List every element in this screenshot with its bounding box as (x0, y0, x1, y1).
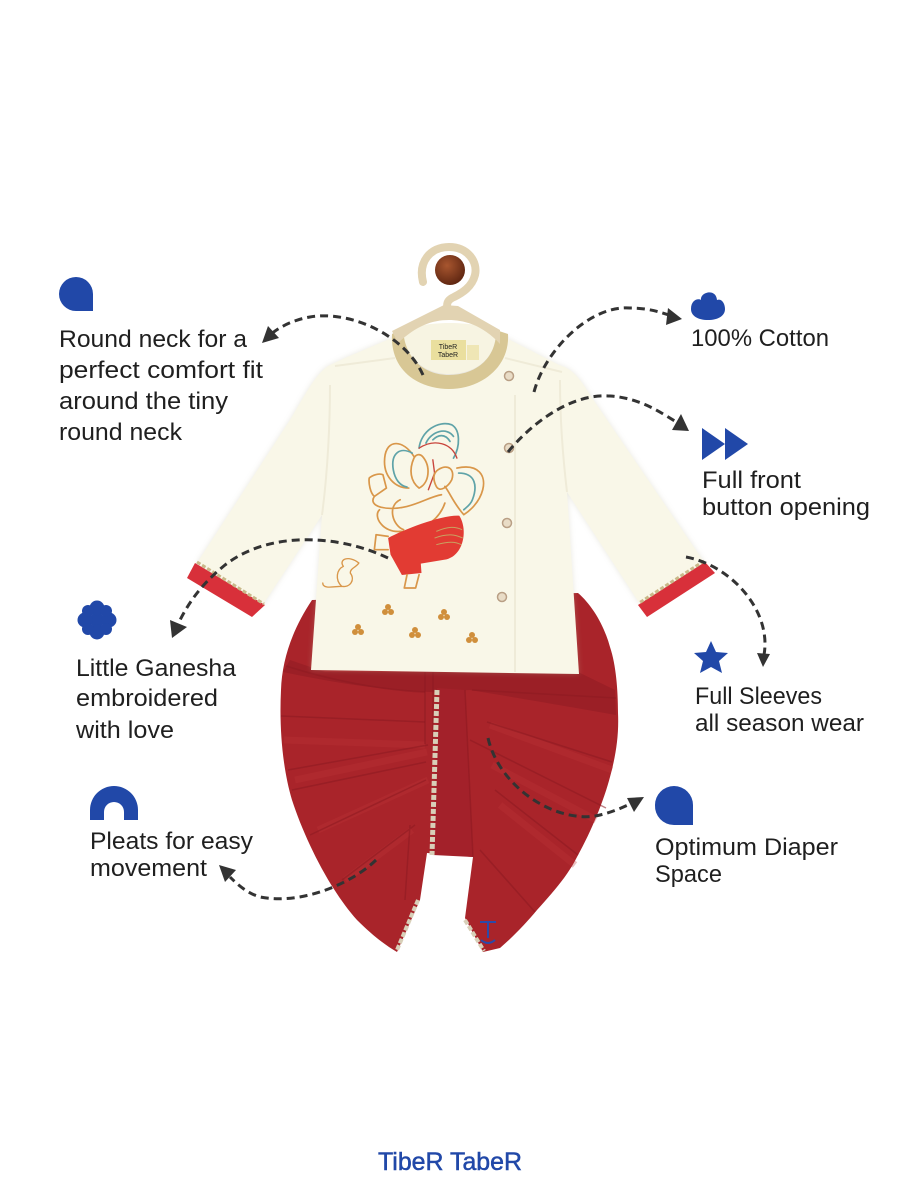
callout: Ganesha: with love (75, 717, 174, 744)
callout: Ganesha (75, 600, 237, 744)
callout: round neck (59, 277, 263, 446)
arrow: pleats (219, 860, 376, 899)
arrow: cotton (534, 308, 682, 392)
callout: cotton: 100% Cotton (691, 325, 829, 352)
callout: diaper space: Optimum Diaper (655, 834, 838, 861)
arrow: sleeves (686, 557, 770, 667)
neck label: TibeR (439, 344, 457, 351)
callout: sleeves: all season wear (695, 710, 864, 737)
callout: pleats: Pleats for easy (90, 828, 253, 855)
right cuff (638, 562, 715, 617)
icon: flower (78, 600, 116, 640)
callout: round neck: around the tiny (59, 388, 228, 415)
icon: drop (59, 277, 93, 311)
callout: pleats (90, 786, 253, 882)
dhoti (280, 593, 618, 952)
callout: front opening: button opening (702, 494, 870, 521)
neck opening (403, 323, 496, 374)
lace trim (432, 690, 437, 855)
callout: sleeves: Full Sleeves (695, 683, 822, 710)
icon: drop (655, 786, 693, 825)
Ganesha embroidery (369, 424, 484, 588)
callout: sleeves (694, 641, 864, 737)
small blue logo on dhoti (480, 922, 496, 943)
collar band (392, 328, 508, 389)
callout: front opening: Full front (702, 467, 801, 494)
callout: diaper space: Space (655, 861, 722, 888)
logo: TibeR TabeR (378, 1148, 522, 1176)
left cuff (187, 563, 265, 617)
shirt (187, 323, 715, 674)
callout: front opening (702, 428, 870, 521)
icon: arch (90, 786, 138, 820)
arrow: front opening (508, 396, 689, 452)
callout: round neck: round neck (59, 419, 183, 446)
icon: star (694, 641, 728, 673)
callout: round neck: perfect comfort fit (59, 357, 263, 384)
arrow: diaper (488, 738, 644, 817)
mouse embroidery (323, 559, 359, 587)
icon: cloud (691, 292, 725, 320)
callout: round neck: Round neck for a (59, 326, 248, 353)
buttons (498, 372, 514, 602)
callout: diaper space (655, 786, 838, 888)
icon: fast forward (702, 428, 748, 460)
wooden knob (435, 255, 465, 285)
callout: cotton (691, 292, 829, 352)
garment photo: dhoti set on hanger (187, 247, 715, 952)
callout: Ganesha: Little Ganesha (76, 655, 237, 682)
callout: pleats: movement (90, 855, 207, 882)
callout: Ganesha: embroidered (76, 685, 218, 712)
arrow: round neck (262, 316, 423, 375)
neck label (431, 340, 479, 360)
arrow: Ganesha (170, 540, 388, 638)
hanger (392, 247, 500, 344)
embroidered dots (352, 604, 478, 643)
neck label: TabeR (438, 352, 458, 359)
